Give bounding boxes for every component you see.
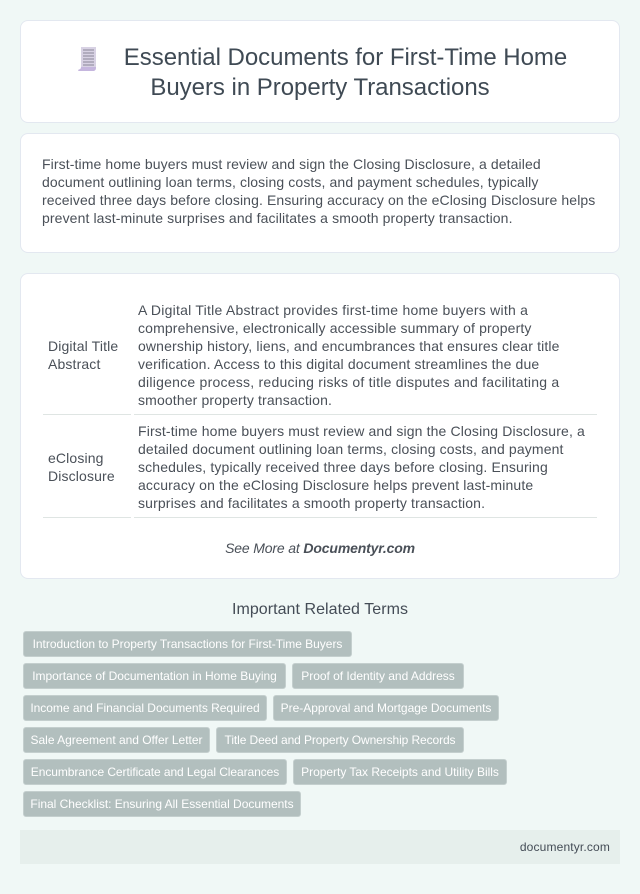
see more link: See More at Documentyr.com xyxy=(225,540,415,556)
intro text: received three days before closing. Ensuring accuracy on the eClosing Disclosure helps xyxy=(42,192,595,208)
tags: related terms: Pre-Approval and Mortgage Documents xyxy=(281,701,491,715)
description: eClosing Disclosure: detailed document outlining loan terms, closing costs, and payment xyxy=(138,441,564,457)
description: eClosing Disclosure xyxy=(138,423,585,511)
description: eClosing Disclosure: schedules, typically received three days before closing. Ensuring xyxy=(138,459,548,475)
label: eClosing Disclosure xyxy=(48,450,115,484)
description: eClosing Disclosure: surprises and facilitates a smooth property transaction. xyxy=(138,495,485,511)
description: Digital Title Abstract: diligence process, reducing risks of title disputes and facilitating a xyxy=(138,374,559,390)
related terms heading: Important Related Terms xyxy=(232,601,408,618)
description: Digital Title Abstract xyxy=(138,302,560,408)
description: Digital Title Abstract: A Digital Title Abstract provides first-time home buyers with a xyxy=(138,302,528,318)
description: Digital Title Abstract: smoother property transaction. xyxy=(138,392,332,408)
label: eClosing Disclosure: eClosing xyxy=(48,450,104,466)
description: Digital Title Abstract: comprehensive, electronically accessible summary of property xyxy=(138,320,532,336)
tags: related terms: Property Tax Receipts and Utility Bills xyxy=(301,765,499,779)
label: Digital Title Abstract: Abstract xyxy=(48,356,100,372)
tags: related terms: Importance of Documentation in Home Buying xyxy=(32,669,277,683)
intro text: prevent last-minute surprises and facilitates a smooth property transaction. xyxy=(42,210,513,226)
intro text: document outlining loan terms, closing costs, and payment schedules, typically xyxy=(42,174,539,190)
label: Digital Title Abstract: Digital Title xyxy=(48,338,118,354)
description: Digital Title Abstract: ownership history, liens, and encumbrances that ensures clear title xyxy=(138,338,560,354)
tags: related terms: Income and Financial Documents Required xyxy=(30,701,260,715)
title: Essential Documents for First-Time Home xyxy=(124,44,567,71)
tags: related terms: Encumbrance Certificate and Legal Clearances xyxy=(31,765,279,779)
panel: intro xyxy=(20,133,620,253)
title xyxy=(124,44,567,101)
tags: related terms: Final Checklist: Ensuring All Essential Documents xyxy=(30,797,294,811)
tags: related terms: Title Deed and Property Ownership Records xyxy=(225,733,455,747)
title: Buyers in Property Transactions xyxy=(150,74,490,101)
label: eClosing Disclosure: Disclosure xyxy=(48,468,115,484)
intro text: First-time home buyers must review and sign the Closing Disclosure, a detailed xyxy=(42,156,541,172)
icon: document scroll xyxy=(78,47,96,71)
footer bar: documentyr.com xyxy=(520,840,610,854)
tags: related terms: Proof of Identity and Address xyxy=(301,669,455,683)
intro text xyxy=(42,156,595,226)
panel: title card xyxy=(20,20,620,123)
panel: document table xyxy=(20,273,620,579)
label: Digital Title Abstract xyxy=(48,338,118,372)
tags: related terms: Introduction to Property Transactions for First-Time Buyers xyxy=(33,637,342,651)
description: eClosing Disclosure: First-time home buyers must review and sign the Closing Disclosure, a xyxy=(138,423,585,439)
description: eClosing Disclosure: accuracy on the eClosing Disclosure helps prevent last-minute xyxy=(138,477,533,493)
footer bar xyxy=(20,830,620,864)
description: Digital Title Abstract: verification. Access to this digital document streamlines the due xyxy=(138,356,539,372)
tags: related terms: Sale Agreement and Offer Letter xyxy=(31,733,202,747)
